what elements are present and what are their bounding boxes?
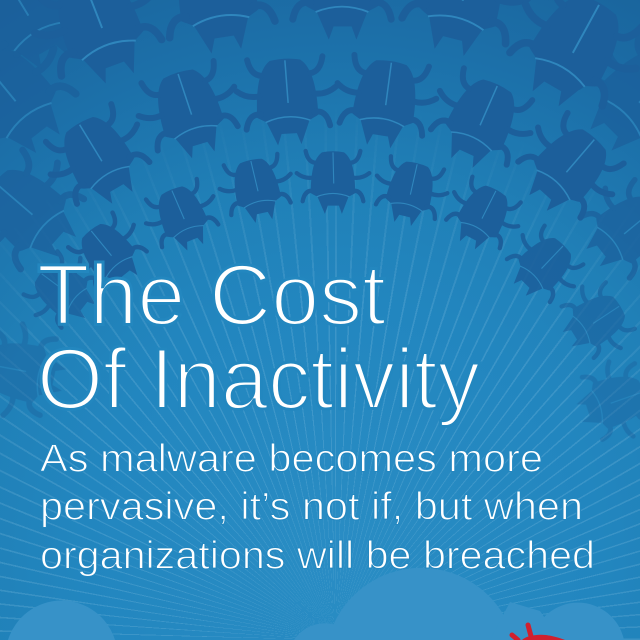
radiating light rays xyxy=(0,168,640,640)
left cloud xyxy=(8,601,115,640)
top row bugs xyxy=(21,0,640,130)
centre cloud xyxy=(294,568,560,640)
lower faded bugs xyxy=(0,318,640,450)
title line 2: Of Inactivity xyxy=(37,332,480,428)
title line 1: The Cost xyxy=(37,248,386,344)
clouds at bottom xyxy=(8,568,624,640)
middle row bugs xyxy=(35,53,633,236)
title xyxy=(37,248,480,428)
inner row bugs xyxy=(18,151,640,370)
outer faint bugs xyxy=(0,0,640,294)
malware bug swarm xyxy=(0,0,640,450)
subtitle xyxy=(40,438,595,578)
icon: red bug in cloud xyxy=(512,625,565,640)
subtitle line 3: organizations will be breached xyxy=(40,534,595,578)
right cloud xyxy=(532,603,624,640)
subtitle line 2: pervasive, it’s not if, but when xyxy=(40,486,583,528)
subtitle line 1: As malware becomes more xyxy=(40,438,543,480)
